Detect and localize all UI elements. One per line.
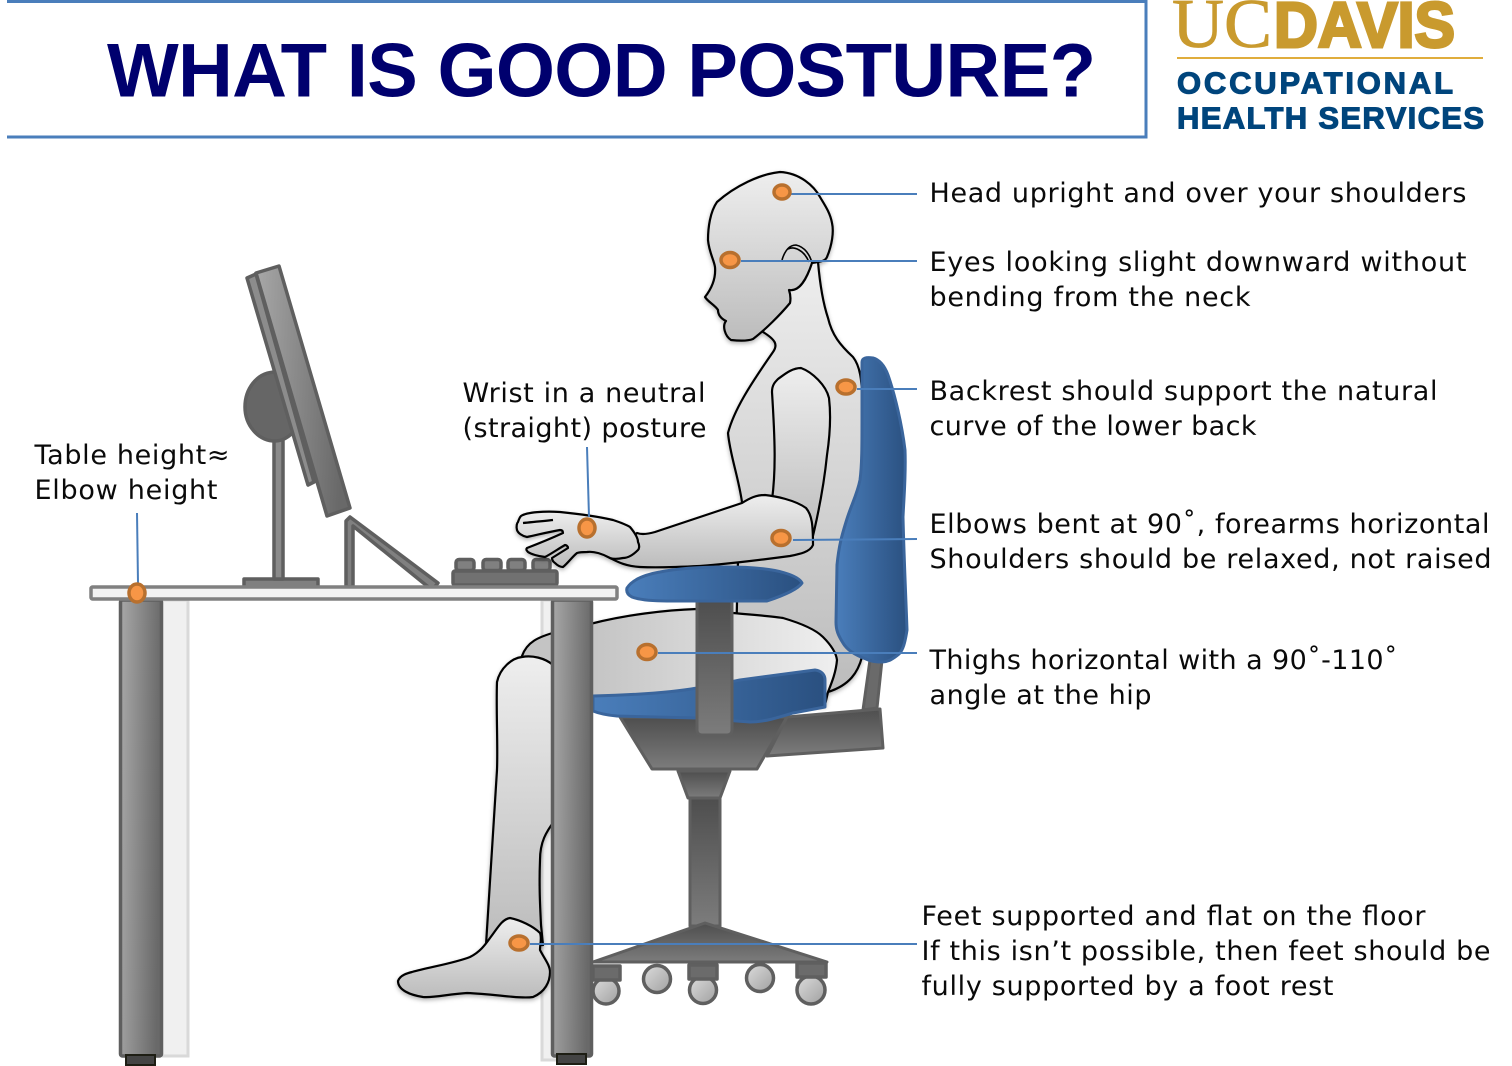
ear: [782, 245, 812, 263]
desk left foot: [126, 1055, 155, 1065]
monitor stand pole: [274, 438, 283, 579]
chair neck: [678, 771, 730, 798]
label: elbows: Elbows bent at 90˚, forearms horizontal: [930, 509, 1490, 540]
label: elbows: [930, 509, 1492, 575]
label: feet: Feet supported and flat on the floor: [922, 901, 1426, 932]
title: WHAT IS GOOD POSTURE?: [107, 28, 1096, 114]
thigh behind leg: [522, 632, 600, 670]
label: thighs: Thighs horizontal with a 90˚-110˚: [928, 645, 1398, 676]
backrest: [836, 358, 907, 662]
backrest post: [863, 660, 882, 710]
monitor screen: [256, 266, 350, 516]
label: elbows: Shoulders should be relaxed, not raised: [930, 544, 1492, 575]
upper arm: [772, 368, 830, 540]
label: backrest: Backrest should support the natural: [930, 376, 1438, 407]
label: wrist: [462, 378, 706, 444]
desk: [91, 587, 617, 1065]
label: feet: fully supported by a foot rest: [922, 971, 1334, 1002]
label: eyes: [930, 247, 1466, 313]
label: feet: If this isn’t possible, then feet should be: [922, 936, 1490, 967]
monitor: [244, 266, 350, 588]
ghost rear desk legs: [162, 600, 556, 1060]
foot: [398, 918, 550, 997]
hand: [517, 512, 639, 567]
label: wrist: (straight) posture: [462, 413, 706, 444]
chair stem: [690, 798, 720, 926]
seat base: [620, 717, 787, 769]
chair wheelbase: [593, 923, 827, 962]
monitor stand base: [244, 579, 318, 588]
logo: UC Davis Occupational Health Services: OCCUPATIONAL: [1177, 66, 1453, 100]
label: feet: [922, 901, 1490, 1002]
label: eyes: Eyes looking slight downward without: [930, 247, 1466, 278]
logo: UC Davis Occupational Health Services: [1172, 0, 1484, 136]
forearm: [610, 495, 813, 567]
rear seat bracket: [767, 709, 883, 756]
label: eyes: bending from the neck: [930, 282, 1251, 313]
lower leg: [486, 656, 555, 945]
label: thighs: angle at the hip: [930, 680, 1152, 711]
label: backrest: [930, 376, 1438, 442]
armrest post: [697, 600, 732, 735]
person: [398, 172, 862, 997]
seat cushion: [593, 670, 825, 722]
label: wrist: Wrist in a neutral: [462, 378, 706, 409]
label: thighs: [928, 645, 1398, 711]
desk top: [91, 587, 617, 599]
logo: UC Davis Occupational Health Services: HEALTH SERVICES: [1177, 100, 1484, 136]
label: table height: Table height≈: [34, 440, 230, 471]
torso and neck: [728, 258, 862, 692]
label: backrest: curve of the lower back: [930, 411, 1257, 442]
orange marker dots: [129, 185, 855, 950]
desk right foot: [557, 1054, 586, 1064]
header frame: [7, 2, 1146, 137]
thigh: [590, 609, 837, 705]
desk right leg: [552, 600, 592, 1056]
armrest: [627, 567, 802, 601]
label: table height: [34, 440, 230, 506]
document holder: [346, 517, 438, 590]
head: [705, 172, 833, 341]
chair: [593, 358, 907, 1004]
monitor back shell: [247, 274, 314, 485]
label: head: Head upright and over your shoulders: [930, 178, 1466, 209]
label: table height: Elbow height: [34, 475, 218, 506]
desk left leg: [120, 600, 162, 1056]
casters: [593, 963, 826, 1004]
leader lines: [137, 194, 917, 944]
keyboard: [453, 560, 557, 585]
monitor mount dome: [245, 372, 296, 441]
